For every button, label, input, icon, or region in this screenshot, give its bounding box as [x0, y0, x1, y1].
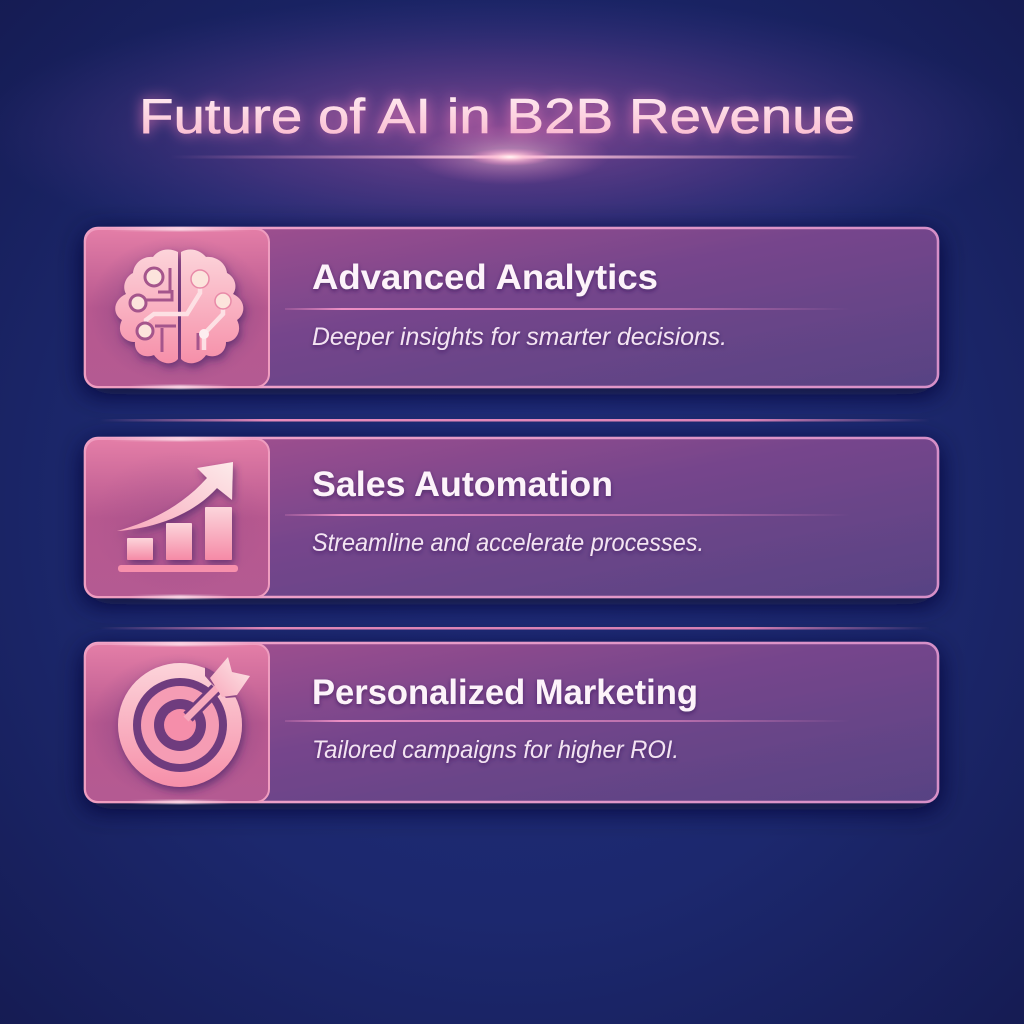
baseline [118, 565, 238, 572]
separator line 1 [100, 419, 930, 422]
arrow gap in rings [205, 667, 236, 698]
divider [285, 308, 850, 310]
arrow fletching [210, 657, 250, 697]
divider [285, 514, 850, 516]
icon: target with arrow [118, 650, 250, 787]
card background [85, 438, 938, 597]
separator line 2 [100, 627, 930, 630]
rising arrow [117, 462, 233, 531]
arrow shaft [186, 687, 218, 719]
bars [127, 507, 232, 560]
icon: growth chart [117, 462, 238, 572]
description: Tailored campaigns for higher ROI. [312, 736, 679, 764]
description: Streamline and accelerate processes. [312, 529, 704, 557]
divider [285, 720, 850, 722]
panel: sales automation [85, 437, 938, 599]
card background [85, 643, 938, 802]
panel: advanced analytics [85, 227, 938, 389]
icon: brain [115, 250, 243, 363]
heading: Personalized Marketing [312, 673, 698, 712]
card background [85, 228, 938, 387]
description: Deeper insights for smarter decisions. [312, 323, 727, 351]
heading: Sales Automation [312, 465, 613, 504]
icon tile [85, 642, 269, 804]
heading: Advanced Analytics [312, 258, 658, 297]
icon tile [85, 227, 269, 389]
panel: personalized marketing [85, 642, 938, 804]
icon tile [85, 437, 269, 599]
title underline flare [170, 125, 860, 185]
title glow [0, 0, 1020, 265]
title: Future of AI in B2B Revenue [139, 90, 855, 144]
